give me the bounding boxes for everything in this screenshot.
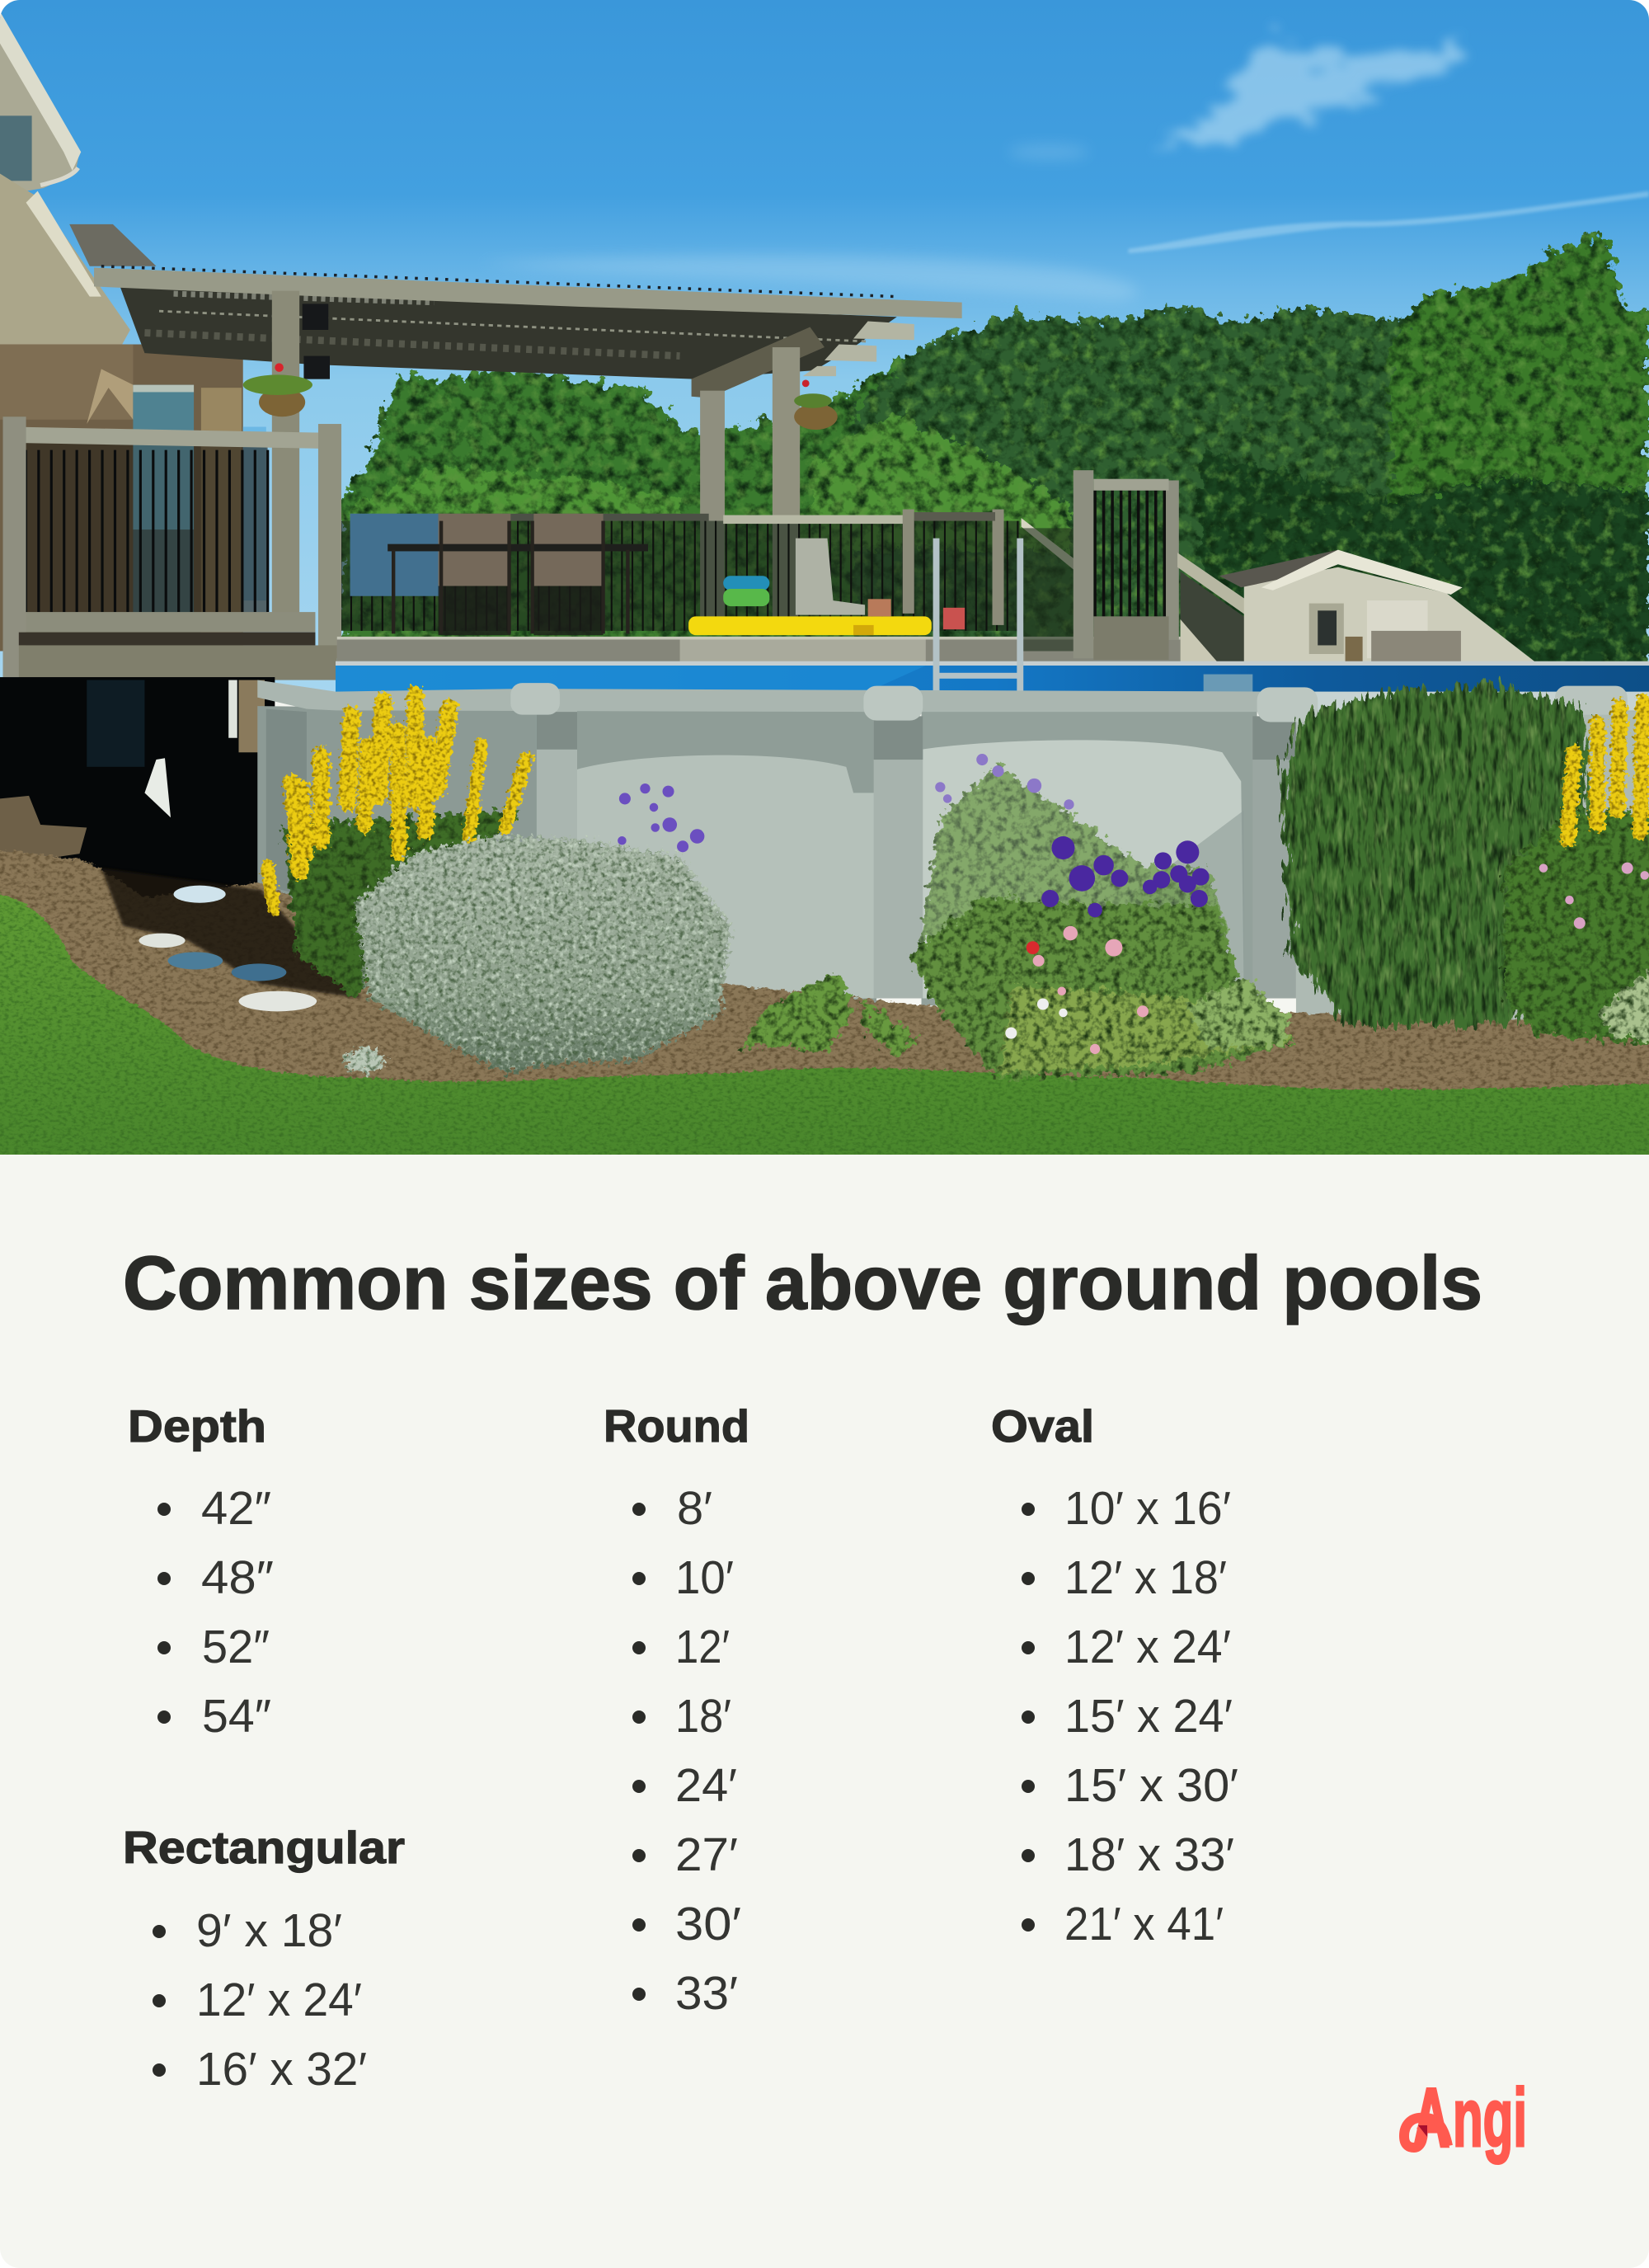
pergola: posts bbox=[700, 391, 725, 618]
flowering bush: lavender blooms bbox=[935, 754, 1074, 810]
Angi logo bbox=[1404, 2072, 1527, 2164]
flowering bush: deep purple blooms bbox=[1041, 836, 1210, 917]
rectangular values: 9′ x 18′ bbox=[196, 1904, 342, 1957]
pool water and cover bbox=[336, 661, 1649, 694]
pool wall: left curved side bbox=[257, 706, 538, 940]
shadow on soil bbox=[101, 868, 362, 999]
round values: 18′ bbox=[675, 1690, 731, 1743]
house: upper roof and window bbox=[0, 12, 156, 356]
round values: 24′ bbox=[675, 1759, 737, 1812]
trees: left group bbox=[341, 349, 917, 637]
purple flowers by first panel bbox=[618, 783, 704, 852]
gate and stairs bbox=[1020, 470, 1338, 663]
hanging flower baskets bbox=[243, 363, 838, 430]
depth heading: Depth bbox=[128, 1400, 266, 1452]
shed bbox=[1219, 550, 1536, 663]
round values bbox=[675, 1482, 741, 2020]
oval heading: Oval bbox=[991, 1400, 1094, 1452]
small hosta plant bbox=[740, 972, 918, 1056]
rectangular values: 16′ x 32′ bbox=[196, 2043, 367, 2096]
trees: shaded lower right bbox=[1200, 449, 1649, 680]
flowering bush: dense foliage bbox=[909, 897, 1294, 1078]
pool toys and lounge chair bbox=[688, 539, 965, 635]
round values: 10′ bbox=[675, 1551, 734, 1604]
logo loop bbox=[1404, 2118, 1448, 2148]
patio table and chairs bbox=[350, 514, 648, 635]
round list bbox=[604, 1400, 749, 2020]
logo loop fold bbox=[1418, 2125, 1427, 2137]
depth values: 48″ bbox=[201, 1551, 274, 1604]
oval values: 15′ x 24′ bbox=[1064, 1690, 1233, 1743]
depth values: 54″ bbox=[202, 1690, 271, 1743]
pool wall: uprights bbox=[537, 709, 577, 868]
rectangular list bbox=[123, 1822, 405, 2096]
oval values: 21′ x 41′ bbox=[1064, 1898, 1224, 1950]
oval bullets bbox=[1022, 1503, 1035, 1932]
oval values: 18′ x 33′ bbox=[1064, 1828, 1234, 1881]
round values: 12′ bbox=[675, 1621, 730, 1673]
pool wall bbox=[257, 680, 1649, 1020]
clouds bbox=[477, 40, 1649, 301]
oval values: 12′ x 24′ bbox=[1064, 1621, 1231, 1673]
pergola bbox=[94, 266, 962, 623]
round values: 30′ bbox=[675, 1898, 741, 1950]
rectangular bullets bbox=[153, 1925, 166, 2077]
pergola: speaker boxes bbox=[303, 303, 328, 330]
flowering garden bush bbox=[909, 754, 1294, 1078]
depth bullets bbox=[157, 1503, 171, 1724]
flowering bush: hosta leaves bbox=[1186, 976, 1292, 1049]
stepping stones bbox=[139, 886, 317, 1011]
pool wall: top rail bbox=[257, 680, 1649, 712]
garden soil bbox=[0, 846, 1649, 1114]
logo wordmark: A bbox=[1413, 2072, 1449, 2164]
depth values: 42″ bbox=[201, 1482, 271, 1535]
deck platform bbox=[337, 637, 1350, 666]
tall grass bush bbox=[1280, 685, 1588, 1024]
yellow flower spikes bbox=[268, 694, 527, 999]
depth values: 52″ bbox=[202, 1621, 270, 1673]
pergola: diagonal brace bbox=[692, 327, 824, 398]
yellow flowers: green stems bbox=[282, 810, 521, 999]
rectangular values: 12′ x 24′ bbox=[196, 1974, 362, 2026]
pool wall: panels behind bushes bbox=[1296, 709, 1649, 1020]
pool ladder bbox=[933, 539, 1023, 692]
flowering bush: pink and red blooms bbox=[1005, 926, 1149, 1054]
trees: tall right tree bbox=[1384, 231, 1649, 505]
trees: sunlit low foliage bbox=[347, 466, 680, 539]
sky gap beside house bbox=[243, 427, 266, 600]
oval values: 10′ x 16′ bbox=[1064, 1482, 1231, 1535]
title: Common sizes of above ground pools bbox=[123, 1241, 1482, 1325]
small silver sprig bbox=[345, 1047, 385, 1074]
rectangular values bbox=[196, 1904, 367, 2096]
logo letters: ngi bbox=[1453, 2072, 1527, 2164]
sky bbox=[0, 0, 1649, 694]
under-deck shadow bbox=[0, 677, 275, 916]
pergola: top beam bbox=[94, 268, 962, 318]
back deck railing bbox=[340, 510, 1020, 631]
pergola: beam ends bbox=[803, 321, 914, 376]
round values: 8′ bbox=[677, 1482, 712, 1535]
depth values bbox=[201, 1482, 274, 1743]
oval values bbox=[1064, 1482, 1238, 1950]
pool wall: second panel bbox=[922, 709, 1257, 1005]
depth list bbox=[128, 1400, 274, 1743]
round heading: Round bbox=[604, 1400, 749, 1452]
photo: above ground pool with deck and garden bbox=[0, 0, 1649, 1155]
round bullets bbox=[632, 1503, 646, 2001]
round values: 33′ bbox=[675, 1967, 738, 2020]
background trees bbox=[340, 234, 1649, 680]
pergola: shaded underside bbox=[120, 286, 897, 379]
house: brick wall and door bbox=[0, 345, 243, 651]
pool wall: rail caps bbox=[510, 683, 560, 715]
oval values: 15′ x 30′ bbox=[1064, 1759, 1238, 1812]
pool wall: first panel bbox=[576, 709, 876, 1005]
right flower shrub bbox=[1505, 702, 1649, 1047]
front deck railing bbox=[3, 416, 341, 680]
round values: 27′ bbox=[675, 1828, 738, 1881]
pool wall: shadow band on second panel bbox=[1128, 810, 1244, 999]
silver foliage bush bbox=[355, 836, 731, 1074]
rectangular heading: Rectangular bbox=[123, 1822, 405, 1873]
oval list bbox=[991, 1400, 1238, 1950]
lawn bbox=[0, 892, 1649, 1187]
flowering bush: sparse upper stems bbox=[920, 764, 1229, 940]
trees: central dark group bbox=[848, 303, 1413, 637]
oval values: 12′ x 18′ bbox=[1064, 1551, 1227, 1604]
